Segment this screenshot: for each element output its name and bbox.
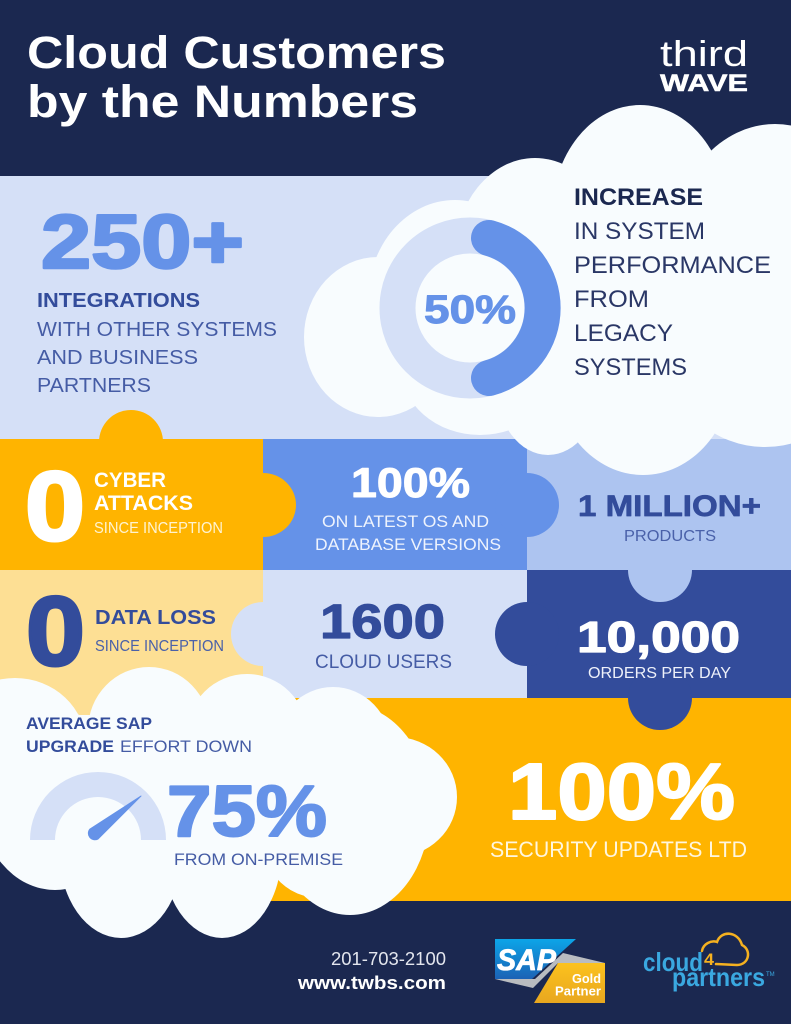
logo: third wave: [660, 33, 748, 97]
stat: 10,000 orders per day: [577, 613, 740, 682]
logo: cloud4partners: [643, 934, 775, 992]
logo: SAP gold partner: Gold: [572, 971, 601, 986]
stat: 1 million+ products: PRODUCTS: [624, 528, 716, 545]
text: average SAP upgrade effort down: [26, 714, 252, 756]
panel: security updates: [270, 698, 791, 901]
stat: 10,000 orders per day: ORDERS PER DAY: [588, 665, 731, 682]
stat: 75% from on-premise: [167, 772, 343, 869]
stat: 0 cyber attacks: CYBER: [94, 469, 166, 492]
logo: SAP gold partner: Partner: [555, 984, 601, 998]
title: by the Numbers: [27, 76, 418, 127]
logo: cloud4partners: TM: [766, 972, 775, 978]
stat: 100% on latest OS: 100%: [351, 459, 470, 506]
chart: speedometer gauge: [30, 772, 166, 840]
panel: data loss: [0, 570, 263, 715]
stat: 10,000 orders per day: 10,000: [577, 613, 740, 662]
cloud: system performance: [304, 105, 791, 475]
stat: 0 data loss: DATA LOSS: [95, 607, 216, 629]
text: increase in system performance: LEGACY: [574, 320, 673, 347]
stat: 100% on latest OS: [315, 459, 501, 554]
text: increase in system performance: FROM: [574, 286, 649, 313]
stat: 75% from on-premise: FROM ON-PREMISE: [174, 850, 343, 869]
panel: cloud users: [231, 570, 527, 698]
stat: 100% security updates: [490, 747, 747, 862]
stat: 1600 cloud users: [315, 596, 452, 673]
stat: 0 cyber attacks: 0: [25, 451, 85, 561]
puzzle tab: products: [628, 538, 692, 602]
stat: 250+ integrations: WITH OTHER SYSTEMS: [37, 319, 277, 341]
stat: 1600 cloud users: CLOUD USERS: [315, 652, 452, 673]
stat: 0 cyber attacks: [25, 451, 223, 561]
text: average SAP upgrade effort down: AVERAGE SAP: [26, 714, 152, 733]
stat: 100% on latest OS: ON LATEST OS AND: [322, 512, 489, 531]
logo: third wave: WAVE: [660, 70, 748, 97]
stat: 0 data loss: [26, 576, 224, 686]
stat: 0 data loss: 0: [26, 576, 85, 686]
panel: OS and database versions: [263, 439, 559, 570]
title: Cloud Customers: [27, 27, 446, 78]
stat: 1600 cloud users: 1600: [320, 596, 445, 649]
contact details: www.twbs.com: [297, 973, 446, 993]
panel: cyber attacks: [0, 410, 263, 570]
stat: 100% on latest OS: DATABASE VERSIONS: [315, 535, 501, 554]
puzzle tab: cyber attacks: [230, 473, 296, 537]
logo: third wave: third: [660, 33, 748, 74]
stat: 100% security updates: 100%: [508, 747, 735, 836]
logo: SAP gold partner: [495, 939, 605, 1003]
panel: orders per day: [495, 570, 791, 730]
stat: 250+ integrations: PARTNERS: [37, 375, 151, 397]
stat: 100% security updates: SECURITY UPDATES LTD: [490, 837, 747, 862]
stat: 250+ integrations: AND BUSINESS: [37, 347, 198, 369]
logo: SAP gold partner: SAP: [497, 944, 557, 977]
stat: 0 cyber attacks: ATTACKS: [94, 492, 193, 515]
logo: cloud4partners: partners: [672, 962, 765, 992]
text: increase in system performance: INCREASE: [574, 184, 703, 211]
chart: 50% donut: [398, 236, 543, 380]
stat: 250+ integrations: INTEGRATIONS: [37, 290, 200, 312]
contact details: 201-703-2100: [331, 949, 446, 969]
text: average SAP upgrade effort down: UPGRADE: [26, 737, 114, 756]
stat: 1 million+ products: 1 MILLION+: [578, 490, 761, 523]
stat: 1 million+ products: [578, 490, 761, 545]
cloud: SAP upgrade effort: [0, 667, 457, 938]
stat: 75% from on-premise: 75%: [167, 772, 327, 852]
text: increase in system performance: SYSTEMS: [574, 354, 687, 381]
contact details: [297, 949, 446, 993]
stat: 0 cyber attacks: SINCE INCEPTION: [94, 520, 223, 537]
text: increase in system performance: [574, 184, 771, 381]
logo: cloud4partners: 4: [704, 950, 715, 969]
panel: integrations background: [0, 176, 791, 440]
stat: 250+ integrations: [37, 200, 277, 397]
stat: 0 data loss: SINCE INCEPTION: [95, 638, 224, 655]
panel: products: [527, 439, 791, 570]
chart: 50% donut: 50%: [424, 288, 516, 332]
title: [27, 27, 446, 127]
text: increase in system performance: IN SYSTEM: [574, 218, 705, 245]
logo: cloud4partners: cloud: [643, 947, 703, 977]
stat: 250+ integrations: 250+: [41, 200, 244, 285]
text: increase in system performance: PERFORMANCE: [574, 252, 771, 279]
text: average SAP upgrade effort down: EFFORT DOWN: [120, 737, 252, 756]
